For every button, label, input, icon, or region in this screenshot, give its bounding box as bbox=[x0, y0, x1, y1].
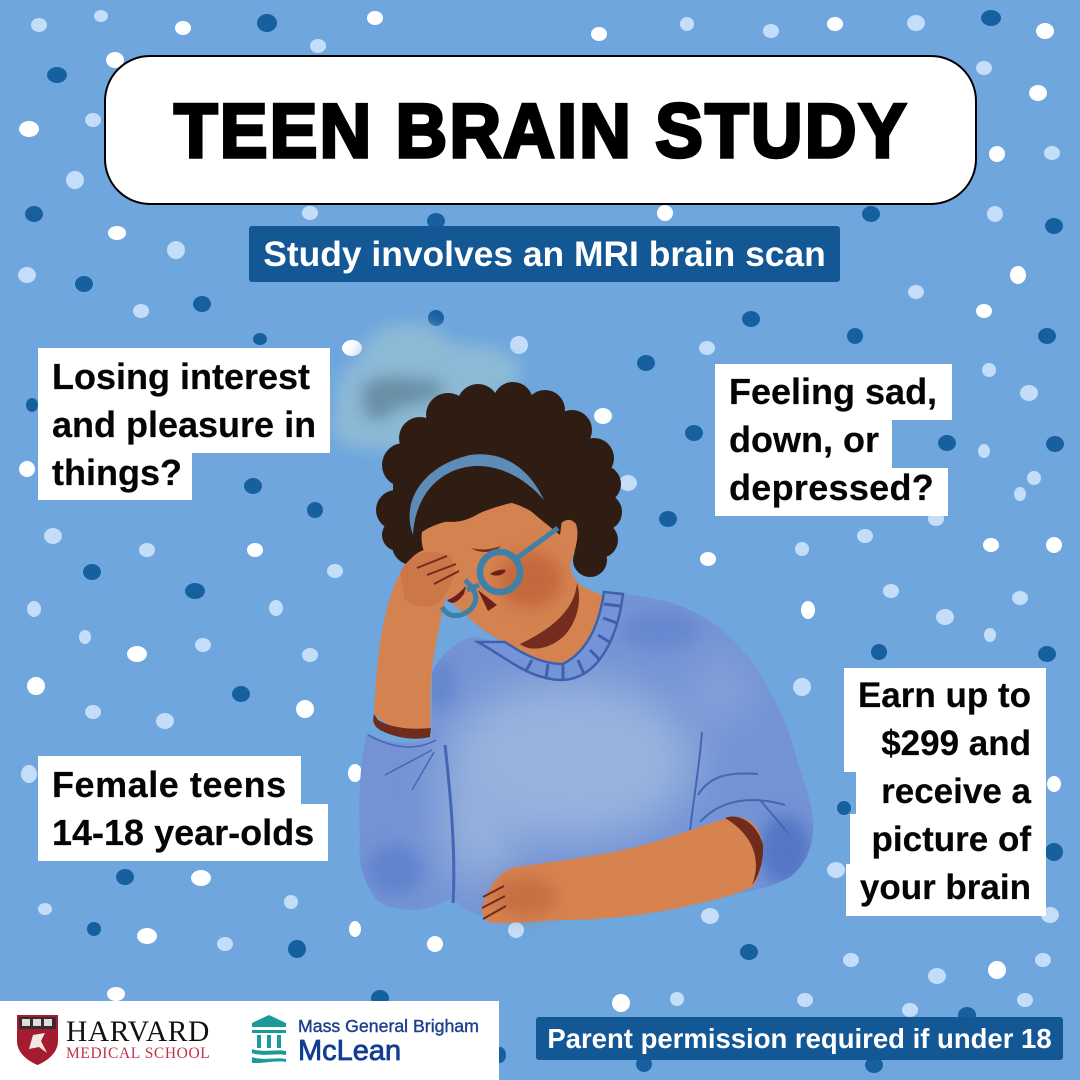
parent permission banner: Parent permission required if under 18 bbox=[547, 1023, 1052, 1054]
logo: Mass General Brigham McLean: Mass General Brigham bbox=[298, 1016, 479, 1036]
callout: earn up to $299: picture of bbox=[872, 820, 1031, 859]
callout: feeling sad bbox=[715, 364, 952, 516]
raised arm and hand bbox=[373, 550, 456, 739]
callout: feeling sad: Feeling sad, bbox=[729, 371, 937, 412]
hair bbox=[376, 382, 622, 580]
callout: earn up to $299: your brain bbox=[860, 868, 1031, 907]
callout: losing interest: things? bbox=[52, 452, 182, 493]
logo: Mass General Brigham McLean bbox=[252, 1015, 479, 1067]
hand fingers bbox=[400, 552, 459, 607]
icon: McLean building bbox=[252, 1015, 286, 1063]
cloud bbox=[332, 323, 521, 452]
callout: losing interest bbox=[38, 348, 330, 500]
title panel bbox=[104, 55, 977, 205]
parent permission banner bbox=[536, 1017, 1063, 1060]
callout: female teens: 14-18 year-olds bbox=[52, 812, 314, 853]
hair fringe over forehead bbox=[432, 495, 565, 535]
illustration: sad teen with glasses and cloud bbox=[330, 316, 814, 928]
callout: earn up to $299: receive a bbox=[881, 772, 1031, 811]
callout: losing interest: Losing interest bbox=[52, 356, 310, 397]
logo: Harvard Medical School: MEDICAL SCHOOL bbox=[66, 1045, 210, 1062]
title text: TEEN BRAIN STUDY bbox=[174, 88, 906, 173]
callout: losing interest: and pleasure in bbox=[52, 404, 316, 445]
callout: earn up to $299 bbox=[844, 668, 1046, 916]
subtitle banner: Study involves an MRI brain scan bbox=[263, 234, 826, 274]
sweater collar bbox=[478, 592, 623, 680]
headband bbox=[410, 454, 544, 535]
callout: earn up to $299: $299 and bbox=[881, 724, 1031, 763]
logo: Harvard Medical School bbox=[17, 1015, 210, 1065]
logo: Harvard Medical School: HARVARD bbox=[66, 1016, 210, 1048]
callout: female teens bbox=[38, 756, 328, 861]
callout: earn up to $299: Earn up to bbox=[858, 676, 1031, 715]
icon: Harvard shield bbox=[17, 1015, 58, 1065]
logo: Mass General Brigham McLean: McLean bbox=[298, 1035, 401, 1067]
callout: female teens: Female teens bbox=[52, 764, 287, 805]
subtitle banner bbox=[249, 226, 840, 282]
eye brows and eye bbox=[447, 546, 506, 611]
callout: feeling sad: depressed? bbox=[729, 467, 934, 508]
callout: feeling sad: down, or bbox=[729, 419, 879, 460]
forearm and hand resting bbox=[482, 817, 763, 923]
glasses bbox=[442, 528, 558, 616]
logo panel bbox=[0, 1001, 499, 1080]
sweater bbox=[359, 594, 813, 915]
neck and face bbox=[422, 503, 604, 664]
